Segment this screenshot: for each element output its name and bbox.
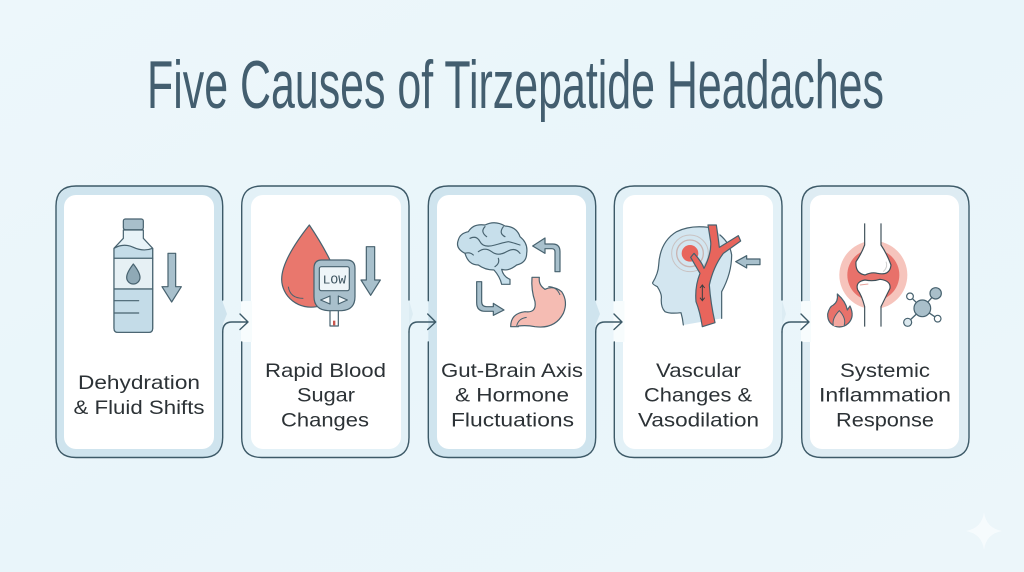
label: gut-brain axis	[441, 360, 583, 432]
label: gut-brain axis: & Hormone	[455, 384, 569, 406]
label: rapid blood sugar: Changes	[281, 410, 369, 432]
icon: sparkle watermark	[966, 512, 1002, 550]
arrow: card 1 to card 2	[223, 314, 248, 332]
icon: water bottle with down arrow	[114, 219, 181, 332]
panel: rapid blood sugar changes	[241, 186, 413, 458]
label: systemic inflammation	[819, 360, 951, 432]
label: vascular changes: Vasodilation	[638, 410, 759, 432]
icon: brain, stomach and cycle arrows	[457, 223, 565, 327]
label: dehydration: Dehydration	[78, 372, 200, 394]
label: gut-brain axis: Fluctuations	[451, 410, 574, 432]
label: rapid blood sugar: Sugar	[297, 384, 356, 406]
icon: blood drop and glucose meter showing low	[282, 225, 380, 326]
label: vascular changes	[638, 360, 759, 432]
label: rapid blood sugar	[265, 360, 386, 432]
panel: dehydration and fluid shifts	[56, 186, 227, 458]
label: systemic inflammation: Systemic	[840, 360, 930, 382]
arrow: card 4 to card 5	[782, 314, 809, 332]
label: dehydration: & Fluid Shifts	[74, 397, 205, 419]
label: systemic inflammation: Inflammation	[819, 384, 951, 406]
label: gut-brain axis: Gut-Brain Axis	[441, 360, 583, 382]
label: vascular changes: Changes &	[644, 384, 752, 406]
arrow: card 3 to card 4	[596, 314, 622, 332]
panel: gut-brain axis and hormone fluctuations	[428, 186, 600, 458]
icon: blood drop and glucose meter showing low: LOW	[323, 274, 347, 288]
label: dehydration	[74, 372, 205, 419]
label: vascular changes: Vascular	[656, 360, 742, 382]
label: systemic inflammation: Response	[836, 410, 934, 432]
icon: inflamed joint, flame and molecule	[828, 223, 941, 327]
label: rapid blood sugar: Rapid Blood	[265, 360, 386, 382]
panel: systemic inflammation response	[801, 186, 969, 458]
icon: head with dilated artery	[653, 225, 760, 327]
arrow: card 2 to card 3	[409, 314, 436, 332]
panel: vascular changes and vasodilation	[614, 186, 786, 458]
